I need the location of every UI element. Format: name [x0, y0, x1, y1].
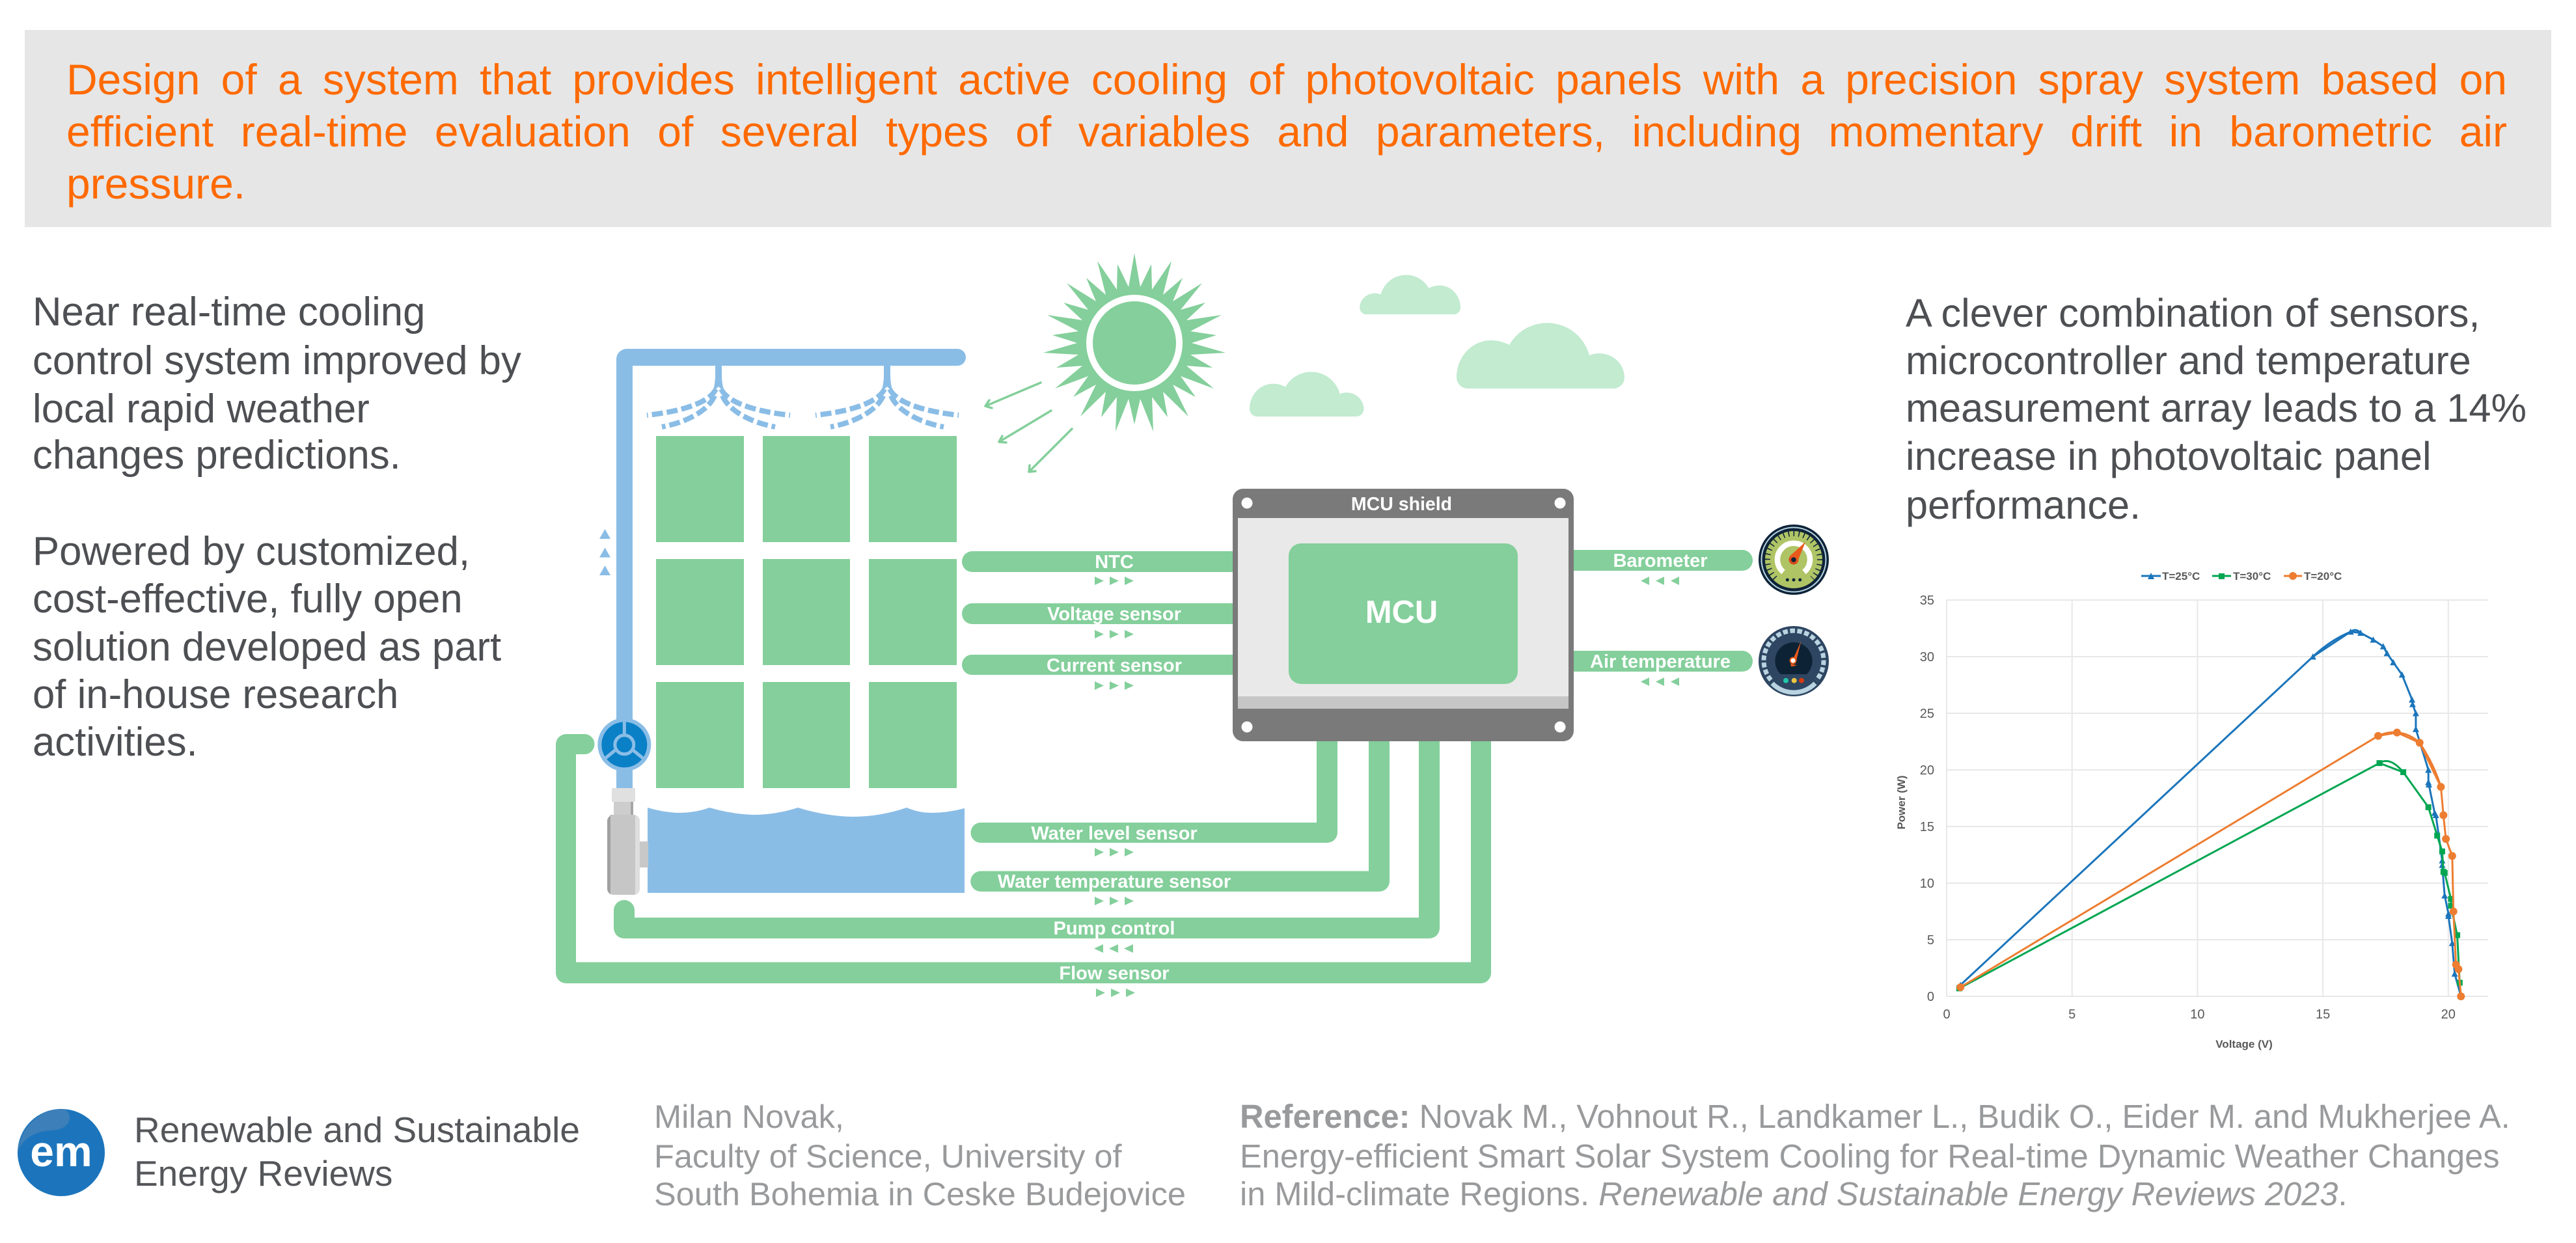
pipe: NTC — [962, 551, 1242, 585]
pipe: Water temperature sensor: Water temperature sensor — [998, 871, 1231, 892]
journal name: Energy Reviews — [134, 1153, 392, 1194]
y axis labels: 35 — [1920, 594, 1934, 608]
author affiliation: Faculty of Science, University of — [654, 1138, 1122, 1175]
x axis labels: 5 — [2068, 1007, 2076, 1022]
journal logo: em — [30, 1127, 92, 1175]
water pump — [607, 788, 648, 895]
clouds — [1250, 275, 1624, 417]
reference citation — [1240, 1098, 2510, 1212]
title banner: pressure. — [66, 159, 245, 208]
paragraph: open solution: activities. — [33, 720, 198, 765]
paragraph: control system: Near real-time cooling — [33, 290, 425, 335]
paragraph: control system — [33, 290, 521, 478]
line: T=25°C — [1960, 632, 2461, 996]
icon: barometer gauge — [1759, 525, 1829, 595]
cloud: large — [1457, 323, 1624, 389]
author affiliation: Milan Novak, — [654, 1098, 844, 1135]
reference citation: Energy-efficient Smart Solar System Cooling for Real-time Dynamic Weather Changes — [1240, 1138, 2500, 1175]
author affiliation: South Bohemia in Ceske Budejovice — [654, 1175, 1186, 1212]
journal name: Renewable and Sustainable — [134, 1110, 580, 1150]
pipe: Air temperature — [1569, 651, 1753, 686]
y axis title: Power (W) — [1895, 775, 1908, 830]
paragraph: open solution: Powered by customized, — [33, 529, 470, 574]
paragraph: control system: local rapid weather — [33, 387, 370, 431]
x axis labels — [1943, 1007, 2456, 1022]
reference citation: Reference: Novak M., Vohnout R., Landkamer L., Budik O., Eider M. and Mukherjee A. — [1240, 1098, 2510, 1135]
MCU shield box — [1233, 489, 1574, 741]
y axis labels: 20 — [1920, 763, 1934, 778]
y axis labels: 30 — [1920, 650, 1934, 664]
y axis labels: 10 — [1920, 877, 1934, 891]
pipe: Water temperature sensor — [970, 735, 1390, 905]
journal name — [134, 1110, 580, 1194]
right text block: measurement array leads to a 14% — [1906, 386, 2527, 430]
x axis labels: 20 — [2441, 1007, 2456, 1022]
title banner — [25, 30, 2551, 227]
pipe: Voltage sensor — [962, 603, 1242, 638]
x axis labels: 0 — [1943, 1007, 1951, 1022]
pipe: Voltage sensor: Voltage sensor — [1047, 604, 1181, 625]
y axis labels: 5 — [1927, 933, 1934, 948]
reference citation: in Mild-climate Regions. Renewable and Sustainable Energy Reviews 2023. — [1240, 1175, 2347, 1212]
title banner: efficient real-time evaluation of several types of variables and parameters, including momentary drift in barometric air — [66, 107, 2507, 156]
chart legend: T=20°C — [2304, 570, 2342, 582]
x axis labels: 10 — [2190, 1007, 2205, 1022]
pipe: Water level sensor: Water level sensor — [1031, 823, 1198, 844]
title banner: Design of a system that provides intelligent active cooling of photovoltaic panels with a precision spray system based on — [66, 55, 2507, 103]
journal logo — [18, 1109, 105, 1196]
left text block — [33, 290, 521, 765]
chart legend: T=25°C — [2162, 570, 2200, 582]
paragraph: control system: changes predictions. — [33, 433, 401, 478]
water tank — [648, 808, 965, 893]
pipe: Current sensor: Current sensor — [1047, 655, 1182, 676]
chart: power versus voltage — [1895, 570, 2488, 1050]
pipe: Current sensor — [962, 655, 1242, 690]
MCU module: MCU — [1365, 595, 1438, 630]
pipe: Flow sensor — [556, 734, 1491, 997]
y axis labels: 15 — [1920, 820, 1934, 834]
y axis labels — [1920, 594, 1934, 1004]
line: T=30°C — [1959, 763, 2461, 996]
icon: flow valve — [597, 718, 651, 771]
pipe: Pump control — [614, 735, 1440, 953]
icon: sun — [1043, 253, 1226, 431]
icon: air temperature gauge — [1759, 626, 1829, 696]
solar panel array — [656, 436, 957, 788]
right text block: microcontroller and temperature — [1906, 338, 2471, 383]
pipe: Barometer: Barometer — [1613, 551, 1708, 571]
paragraph: open solution: solution developed as part — [33, 625, 501, 670]
curve smoothing near the power peaks — [2313, 630, 2441, 787]
pipe: Flow sensor: Flow sensor — [1059, 963, 1170, 984]
y axis labels: 25 — [1920, 707, 1934, 721]
pipe: NTC: NTC — [1095, 552, 1134, 573]
right text block: performance. — [1906, 483, 2141, 527]
pipe: Barometer — [1569, 550, 1753, 585]
line: T=20°C — [1960, 733, 2461, 996]
chart gridlines — [1947, 600, 2488, 996]
chart legend: T=30°C — [2233, 570, 2271, 582]
pipe: Water level sensor — [971, 735, 1337, 856]
chart legend — [2141, 570, 2342, 582]
cloud: small upper — [1360, 275, 1460, 314]
pipe: Air temperature: Air temperature — [1590, 651, 1731, 672]
author affiliation — [654, 1098, 1186, 1212]
paragraph: open solution: cost-effective, fully open — [33, 577, 463, 622]
x axis labels: 15 — [2316, 1007, 2330, 1022]
paragraph: open solution — [33, 529, 501, 765]
right text block: A clever combination of sensors, — [1906, 291, 2480, 335]
paragraph: control system: control system improved by — [33, 338, 521, 383]
pipe: Pump control: Pump control — [1054, 918, 1175, 939]
right text block — [1906, 291, 2527, 527]
paragraph: open solution: of in-house research — [33, 672, 398, 717]
right text block: increase in photovoltaic panel — [1906, 434, 2432, 478]
spray nozzles — [647, 364, 959, 427]
cloud: small lower — [1250, 372, 1363, 417]
flow direction arrows — [599, 529, 610, 575]
x axis title: Voltage (V) — [2215, 1038, 2273, 1050]
water supply pipe — [616, 349, 966, 788]
MCU shield box: MCU shield — [1351, 494, 1452, 515]
y axis labels: 0 — [1927, 990, 1934, 1004]
sun ray arrows — [985, 383, 1072, 472]
MCU module — [1289, 543, 1518, 684]
